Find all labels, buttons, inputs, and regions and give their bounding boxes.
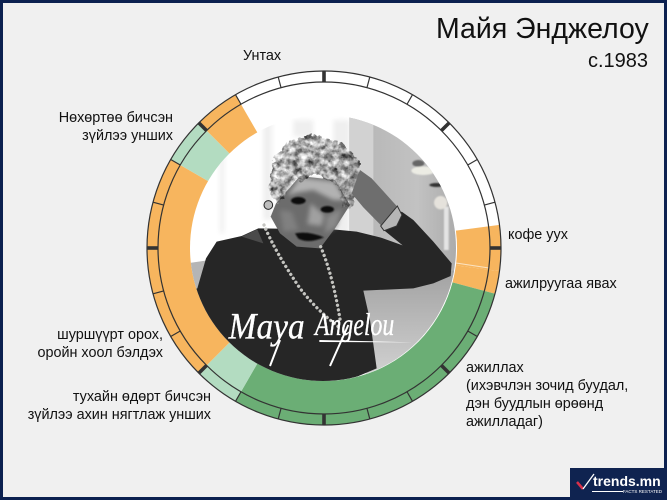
label: read to husband: зүйлээ унших [82,128,173,144]
divider between coffee and commute [456,263,489,268]
earring [264,201,273,209]
segment: coffee [456,225,501,271]
segment: read to husband orange [199,95,258,154]
label: work [466,360,628,430]
logo rule [592,491,623,492]
label: coffee: кофе уух [508,227,568,243]
hand [352,170,397,226]
necklace [264,225,341,327]
watch [381,206,402,231]
wall [349,113,463,300]
label: work: (ихэвчлэн зочид буудал, [466,378,628,394]
label: work: ажиллах [466,360,524,376]
label: shower and dinner [37,327,163,361]
curtain [220,120,349,233]
icon: check mark [576,474,594,490]
logo tagline: FACTS RESTATED [623,489,662,494]
portrait photo [190,118,456,381]
eyes, mouth [291,197,334,241]
body [187,212,452,387]
activity segments [147,95,501,425]
logo text: trends.mn [593,473,661,489]
chest [242,229,263,243]
clock dial: white disc [147,71,501,425]
label: read to husband [59,110,173,144]
label: shower and dinner: шуршүүрт орох, [57,327,163,343]
label: shower and dinner: оройн хоол бэлдэх [37,345,163,361]
signature: Maya [228,306,305,347]
label: re-read writing: зүйлээ ахин нягтлаж унших [28,407,211,423]
label: sleep: Унтах [243,48,281,64]
label: re-read writing [28,389,211,423]
lamp and flowers [411,160,449,250]
segment: work [236,282,495,425]
segment: commute [452,265,500,294]
year: с.1983 [588,50,648,72]
label: work: дэн буудлын өрөөнд [466,396,603,412]
label: commute: ажилруугаа явах [505,276,617,292]
title: Майя Энджелоу [436,13,649,45]
sofa [364,270,454,374]
signature: Angelou [314,306,394,342]
label: work: ажилладаг) [466,414,543,430]
hour ticks [147,71,501,425]
signature [228,312,410,366]
logo: trends.mn [570,468,667,500]
hair [268,134,362,207]
label: re-read writing: тухайн өдөрт бичсэн [73,389,211,405]
infographic: daily routine clock [146,70,502,426]
segment: re-read writing [199,342,258,401]
label: read to husband: Нөхөртөө бичсэн [59,110,173,126]
clock rings [147,71,501,425]
segment: read to husband light [171,123,230,182]
neck and face [271,176,350,248]
segment: shower and dinner [147,160,230,373]
